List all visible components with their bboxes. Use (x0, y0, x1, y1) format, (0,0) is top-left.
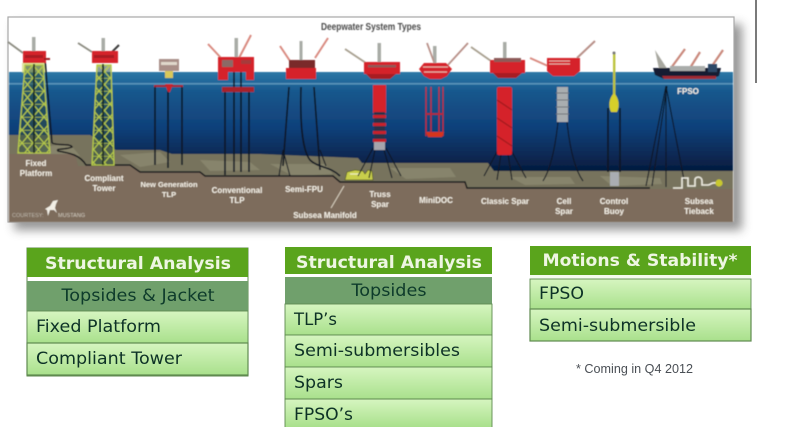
platform: compliant tower (78, 38, 119, 165)
platform: semi-FPU (279, 38, 340, 176)
header (285, 247, 492, 274)
label: conventional TLP: Conventional (212, 186, 262, 195)
label: cell spar: Cell (557, 197, 571, 206)
panel shadow (14, 24, 742, 230)
courtesy credit: COURTESY: (12, 213, 44, 219)
label: control buoy: Buoy (604, 207, 625, 216)
panel: structural analysis topsides: FPSO’s (294, 405, 353, 425)
panel: structural analysis topsides: Topsides (350, 281, 427, 301)
platform: conventional TLP (208, 35, 254, 175)
panel frame (8, 17, 734, 222)
label: MiniDOC: MiniDOC (419, 196, 453, 205)
panel: motions and stability (530, 246, 751, 341)
arrow: subsea manifold pointer (331, 186, 344, 208)
right edge vertical rule (755, 0, 757, 83)
platform: new generation TLP (154, 59, 183, 168)
panel: motions and stability: Semi-submersible (539, 316, 696, 336)
panel: motions and stability: Motions & Stability* (542, 251, 738, 271)
row: fixed platform (27, 311, 248, 343)
panel: structural analysis topsides: Spars (294, 373, 343, 393)
chart title: Deepwater System Types (321, 22, 421, 33)
label: new generation TLP: New Generation (140, 180, 198, 189)
label: fixed platform: Fixed (26, 159, 46, 168)
label: compliant tower: Tower (93, 184, 115, 193)
panel: structural analysis topsides (285, 247, 492, 427)
platform: truss spar (345, 43, 401, 178)
row: FPSOs (285, 399, 492, 427)
subheader (27, 281, 248, 311)
platform: MiniDOC (419, 43, 468, 137)
scene (8, 35, 733, 222)
label: FPSO: FPSO (677, 87, 699, 96)
panel: motions and stability: FPSO (539, 284, 584, 304)
label: subsea tieback: Subsea (685, 197, 713, 206)
platform: cell spar (530, 41, 595, 181)
label: subsea tieback: Tieback (684, 207, 714, 216)
label: classic spar: Classic Spar (481, 197, 529, 206)
panel: structural analysis topsides: Structural Analysis (296, 253, 482, 273)
panel: structural analysis topsides: Semi-submersibles (294, 341, 460, 361)
label: truss spar: Spar (371, 200, 389, 209)
seabed edge line (52, 143, 650, 188)
label: conventional TLP: TLP (229, 196, 245, 205)
spacer (530, 275, 751, 279)
panel: structural analysis topsides and jacket (27, 248, 248, 376)
courtesy credit (12, 200, 85, 219)
row: semi-submersible (530, 309, 751, 341)
brown ground (9, 154, 733, 222)
row: semi-submersibles (285, 335, 492, 367)
row: compliant tower (27, 343, 248, 375)
label: control buoy: Control (600, 197, 628, 206)
label: new generation TLP: TLP (162, 190, 176, 199)
seabed rock (9, 135, 733, 190)
row: FPSO (530, 279, 751, 309)
panel: structural analysis topsides and jacket: Compliant Tower (36, 349, 182, 369)
header (530, 246, 751, 275)
label: cell spar: Spar (555, 207, 573, 216)
label: subsea manifold: Subsea Manifold (293, 211, 357, 220)
label: fixed platform: Platform (20, 169, 52, 178)
platform: classic spar (471, 42, 526, 180)
subheader (285, 277, 492, 304)
system labels (20, 87, 714, 220)
row: spars (285, 367, 492, 399)
platform: FPSO (646, 49, 723, 187)
panel: structural analysis topsides and jacket: Topsides & Jacket (60, 286, 215, 306)
subsea manifold (345, 170, 373, 180)
label: semi-FPU: Semi-FPU (285, 185, 323, 194)
platform: control buoy (608, 52, 620, 186)
panel: structural analysis topsides and jacket: Fixed Platform (36, 317, 161, 337)
label: truss spar: Truss (369, 190, 391, 199)
sea (9, 72, 733, 174)
courtesy credit: MUSTANG (58, 213, 85, 219)
panel: structural analysis topsides: TLP’s (293, 310, 337, 330)
illustration panel: deepwater system types (8, 17, 742, 230)
panel: structural analysis topsides and jacket: Structural Analysis (45, 254, 231, 274)
footnote: * Coming in Q4 2012 (576, 361, 693, 376)
row: TLPs (285, 304, 492, 335)
label: compliant tower: Compliant (84, 174, 124, 183)
platform: fixed platform (8, 37, 52, 153)
subsea tieback (673, 177, 723, 188)
header (27, 248, 248, 277)
